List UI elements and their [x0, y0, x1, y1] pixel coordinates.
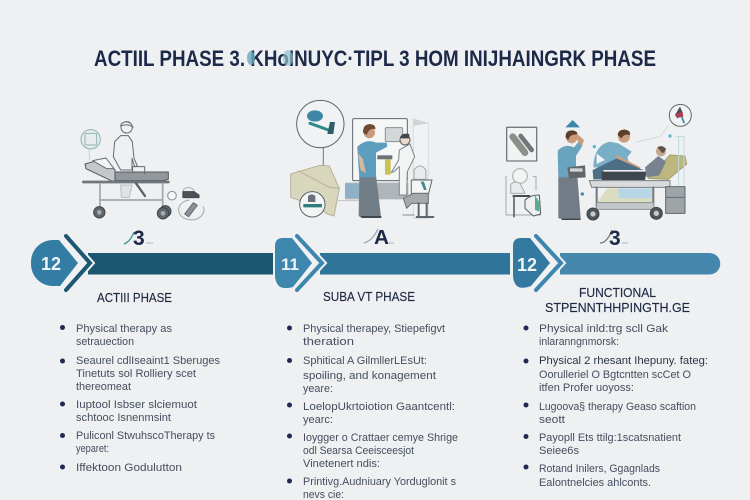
small marker 1: [124, 227, 153, 250]
panel: functional phase list: Physical inld:trg scll Gak: [539, 323, 669, 335]
up arrow marker: [565, 120, 580, 127]
panel: subacute phase list: spoiling, and konagement: [303, 370, 436, 382]
panel: subacute phase list: Sphitical A GilmllerLEsUt:: [303, 355, 427, 367]
small marker 1: 3: [133, 227, 145, 250]
panel: subacute phase list: yeare:: [303, 383, 333, 395]
panel: subacute phase list: theration: [303, 336, 354, 348]
panel: active phase list: setrauection: [76, 336, 134, 348]
illustration: patient bed with caregiver: [81, 122, 204, 220]
panel: functional phase list: itfen Profer uoyoss:: [539, 382, 634, 394]
panel: subacute phase list: Ioygger o Crattaer cemye Shrige: [303, 432, 458, 444]
heading: subacute phase: SUBA VT PHASE: [323, 290, 415, 304]
panel: active phase list: yeparet:: [76, 443, 109, 455]
panel: functional phase list: Lugoova§ therapy Geaso scaftion: [539, 401, 696, 413]
small marker 2: A: [374, 227, 389, 249]
illustration: therapist with standing patient: [291, 100, 433, 218]
icon: monitor circle: [81, 130, 100, 160]
treating therapist: [593, 130, 643, 179]
panel: functional phase list: seott: [539, 414, 565, 426]
heading: functional phase: STPENNTHHPINGTH.GE: [545, 301, 690, 315]
panel: functional phase list: Rotand Inilers, Ggagnlads: [539, 463, 660, 475]
panel: functional phase list: Ealontnelcies ahlconts.: [539, 477, 651, 489]
panel: functional phase list: Oorulleriel O Bgtcntten scCet O: [539, 369, 691, 381]
side cabinet and stand: [666, 137, 685, 213]
panel: subacute phase list: Physical therapey, Stiepefigvt: [303, 323, 445, 335]
clipboard: [567, 165, 586, 178]
panel: functional phase list: [524, 323, 708, 489]
timeline bar: subacute phase: [320, 253, 510, 274]
panel: subacute phase list: [287, 323, 458, 500]
therapist: [357, 124, 387, 218]
panel: active phase list: [60, 323, 220, 474]
patient lying on bed: [602, 146, 687, 180]
seated figure in chair: [403, 166, 433, 217]
panel: subacute phase list: Printivg.Audniuary Yorduglonit s: [303, 476, 456, 488]
icon: callout circle with device: [297, 100, 344, 165]
panel: active phase list: Tinetuts sol Rolliery scet: [76, 368, 196, 380]
title: ACTIIL PHASE 3. KHoINUYC·TIPL 3 HOM INIJHAINGRK PHASE: [94, 46, 656, 71]
panel: active phase list: Seaurel cdlIseaint1 Sberuges: [76, 355, 220, 367]
accent dots: [581, 134, 672, 196]
badge 2: [275, 236, 322, 290]
timeline bar: active phase: [88, 253, 273, 274]
panel: active phase list: schtooc Isnenmsint: [76, 412, 171, 424]
small marker 2: [364, 227, 394, 249]
panel: functional phase list: Payopll Ets ttilg:1scatsnatient: [539, 432, 681, 444]
standing carer: [558, 130, 584, 220]
panel: subacute phase list: yearc:: [303, 414, 333, 426]
badge 3: 12: [517, 255, 537, 275]
seated outline figure: [506, 169, 541, 217]
icon: roller square: [507, 127, 537, 161]
badge 2: 11: [281, 255, 299, 274]
panel: subacute phase list: LoelopUkrtoiotion Gaantcentl:: [303, 401, 455, 413]
foam wedge with inset: [291, 165, 339, 217]
panel: active phase list: Physical therapy as: [76, 323, 172, 335]
panel: functional phase list: Physical 2 rhesant Ihepuny. fateg:: [539, 355, 708, 367]
panel: subacute phase list: Vinetenert ndis:: [303, 458, 380, 470]
hospital bed: [83, 158, 171, 219]
illustration: therapist treating patient on bed: [506, 104, 691, 220]
badge 1: [31, 236, 90, 290]
heading: functional phase: [545, 286, 690, 315]
badge 1: 12: [41, 254, 61, 274]
panel: active phase list: Iuptool Isbser slciemuot: [76, 399, 197, 411]
heading: functional phase: FUNCTIONAL: [579, 286, 656, 300]
panel: subacute phase list: odl Searsa Ceeisceesjot: [303, 445, 414, 457]
icon: top right callout circle: [637, 104, 691, 142]
equipment icons: [168, 188, 204, 220]
panel: functional phase list: Seiee6s: [539, 445, 579, 457]
panel: active phase list: Iffektoon Godulutton: [76, 462, 182, 474]
treatment bed: [587, 181, 670, 220]
panel: active phase list: thereomeat: [76, 381, 131, 393]
badge 3: [513, 236, 561, 290]
caregiver figure: [113, 122, 137, 197]
back wall panel: [338, 118, 428, 218]
panel: active phase list: Puliconl StwuhscoTherapy ts: [76, 430, 215, 442]
timeline bar: functional phase: [560, 253, 720, 274]
panel: functional phase list: inlaranngnmorsk:: [539, 336, 619, 348]
small marker 3: 3: [609, 227, 621, 250]
small marker 3: [600, 227, 628, 250]
heading: active phase: ACTIII PHASE: [97, 291, 172, 305]
standing patient: [391, 134, 415, 195]
handheld device: [377, 155, 392, 175]
